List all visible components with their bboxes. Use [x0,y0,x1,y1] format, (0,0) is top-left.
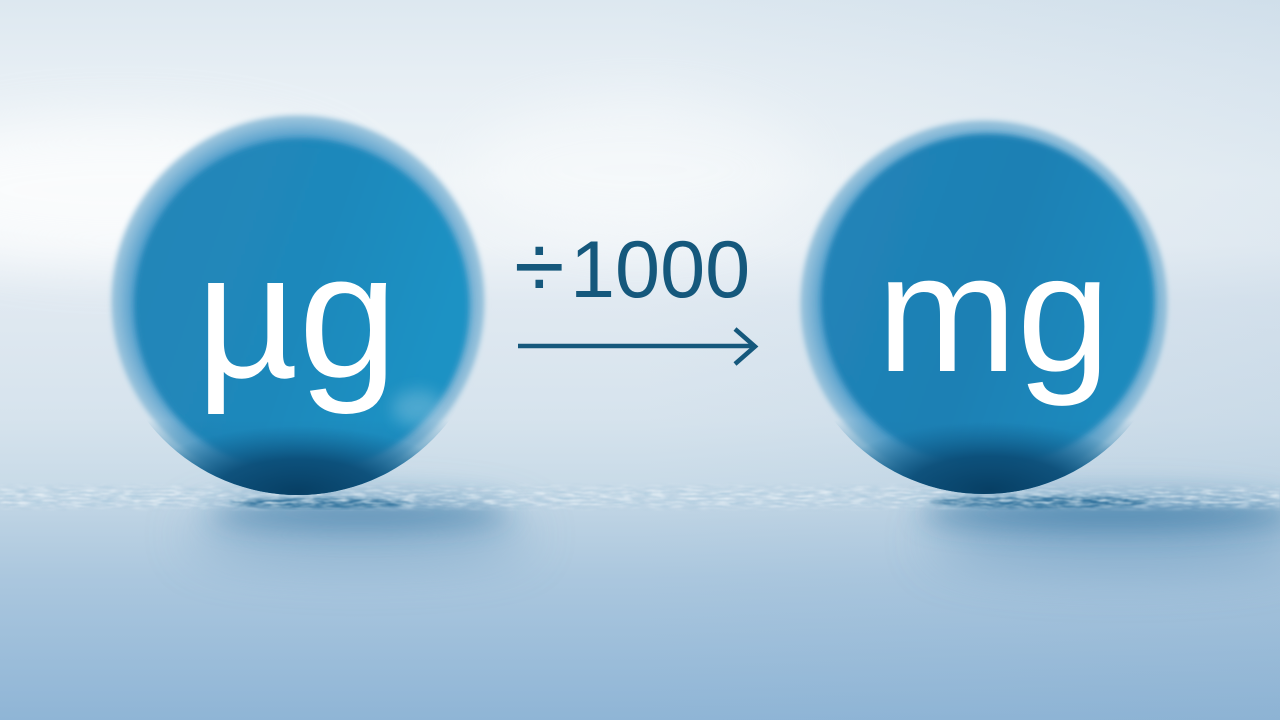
label: µg: µg [196,216,398,415]
conversion factor label: 1000 [570,225,750,315]
arrow: conversion direction [518,329,755,364]
conversion factor label: ÷ [514,216,564,318]
label: mg: mg [877,219,1110,407]
shadow: left sphere [190,498,530,559]
shadow: right sphere [920,496,1280,566]
sphere: microgram [108,112,488,495]
table edge texture [0,485,1280,511]
sphere: milligram [798,117,1170,494]
